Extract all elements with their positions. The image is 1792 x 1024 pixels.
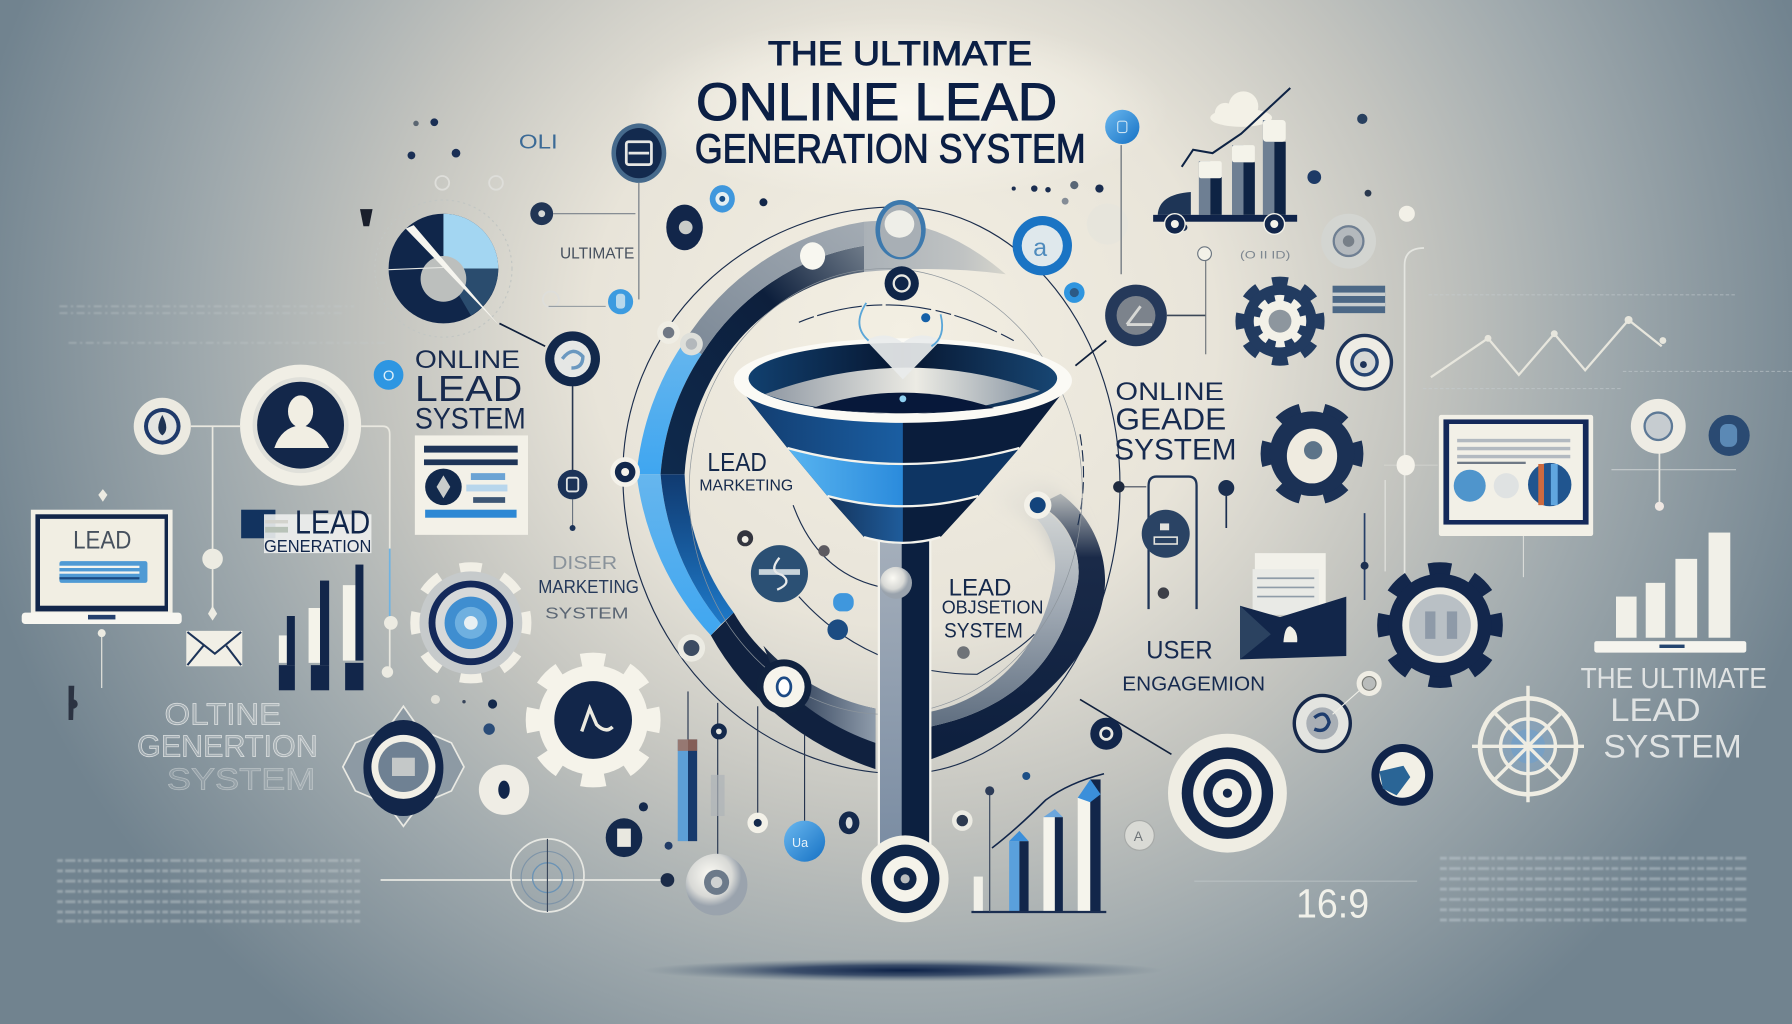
funnel label: lead objection system — [942, 574, 1043, 643]
floor shadow — [642, 959, 1163, 982]
ring segment: top light gray — [864, 221, 1006, 274]
label: OLI: OLI — [519, 131, 558, 154]
navy badge — [611, 123, 666, 183]
funnel label: lead objection system: LEAD — [949, 574, 1011, 601]
monitor — [1439, 415, 1593, 577]
funnel label: lead marketing: MARKETING — [699, 477, 793, 494]
ghost label: online generation system: OLTINE — [165, 697, 281, 732]
droplet — [866, 335, 941, 379]
padlock icon — [1113, 477, 1369, 609]
ghost label: the ultimate lead system: THE ULTIMATE — [1581, 663, 1767, 695]
ring segment: bottom steel — [763, 646, 875, 743]
funnel band 2 — [787, 448, 1019, 506]
funnel label: lead marketing: LEAD — [707, 447, 767, 477]
small cream node — [479, 765, 529, 815]
ghost label: online generation system — [137, 697, 318, 797]
gear: navy with white gear — [1242, 283, 1318, 359]
left label: online lead system — [415, 346, 526, 436]
right small floating dots — [1240, 114, 1415, 261]
faint text block: bottom right — [1440, 858, 1746, 920]
right curved connector — [1384, 248, 1438, 577]
node: top of stem sphere — [880, 567, 912, 599]
label: diser marketing system: DISER — [552, 552, 617, 573]
faint text block: bottom left — [57, 861, 360, 921]
gear: large navy — [1269, 410, 1355, 497]
right node with crosshair — [1611, 399, 1750, 511]
centre bar chart — [952, 772, 1106, 912]
blue hanging bar — [678, 739, 697, 841]
ghost label: the ultimate lead system: SYSTEM — [1603, 729, 1742, 765]
label: lead generation: LEAD — [295, 505, 370, 542]
ring node with leader — [1293, 671, 1382, 753]
right label: online geade system: ONLINE — [1115, 378, 1224, 406]
ghost label: online generation system: SYSTEM — [167, 762, 315, 797]
title — [695, 35, 1086, 171]
thin outer circle — [623, 207, 1120, 774]
funnel separators — [787, 448, 1019, 543]
title: GENERATION SYSTEM — [695, 125, 1086, 171]
ship wheel target — [1472, 686, 1584, 802]
small navy node with leader — [1080, 699, 1171, 754]
ghost label: online generation system: GENERTION — [137, 729, 318, 764]
ring segment: right steel — [929, 505, 1079, 727]
title: ONLINE LEAD — [696, 73, 1057, 132]
ghost label: the ultimate lead system: LEAD — [1610, 692, 1701, 728]
label: lead generation — [241, 505, 371, 556]
label: diser marketing system: MARKETING — [538, 576, 639, 597]
ring segment: upper light blue — [637, 343, 702, 474]
cream sphere — [686, 854, 747, 915]
gear: navy with window — [1386, 571, 1494, 679]
funnel label: lead objection system: OBJSETION — [942, 597, 1043, 618]
ring segment: bottom navy — [711, 613, 875, 769]
ring node navy — [1336, 334, 1393, 391]
top sphere node — [875, 200, 926, 259]
hexagon target — [343, 706, 464, 826]
laptop — [22, 510, 182, 624]
right label: online geade system: GEADE — [1115, 402, 1226, 437]
striped text tag — [1333, 286, 1385, 313]
label: user engagement — [1122, 636, 1265, 695]
left label: online lead system: ONLINE — [415, 346, 520, 374]
concentric target — [1168, 734, 1287, 853]
faint text block: upper left — [59, 306, 389, 343]
funnel — [734, 303, 1072, 846]
top left icons — [360, 118, 666, 346]
white ring node — [757, 659, 811, 714]
right small floating dots: (O II ID) — [1240, 249, 1291, 261]
funnel rim — [734, 338, 1072, 423]
title glow — [623, 17, 1171, 200]
left label: online lead system: LEAD — [415, 368, 522, 409]
ring segment: upper gray — [683, 222, 864, 354]
ring segment: lower light blue — [637, 474, 721, 635]
small floating dots lower left — [69, 686, 497, 735]
blue ball — [784, 821, 825, 862]
funnel liquid — [813, 393, 994, 413]
label: lead generation: GENERATION — [264, 536, 371, 556]
gear: white with navy center — [536, 663, 650, 777]
top right chart truck — [1105, 88, 1297, 274]
funnel mouth — [749, 343, 1057, 414]
funnel base target — [862, 835, 949, 922]
right label: online geade system — [1114, 378, 1237, 466]
central ring diagram — [623, 207, 1120, 774]
funnel band 3 — [827, 496, 978, 543]
small medal: A — [1134, 829, 1144, 844]
blue badge: O — [383, 369, 394, 385]
connector node column — [545, 331, 600, 531]
funnel band 1 — [734, 381, 1072, 464]
laptop: LEAD — [73, 527, 131, 555]
inner icon badge — [751, 545, 808, 602]
gear: blue target — [418, 570, 523, 675]
label: diser marketing system — [538, 552, 639, 622]
small dots — [408, 118, 460, 159]
funnel stem — [878, 537, 931, 846]
blue bubble — [1013, 216, 1072, 275]
dark drop node — [885, 266, 919, 301]
label: user engagement: USER — [1146, 636, 1213, 664]
label: diser marketing system: SYSTEM — [545, 605, 629, 622]
droplet arcs — [859, 303, 942, 346]
aspect ratio label: 16:9 — [1296, 881, 1369, 927]
zigzag line chart — [1423, 295, 1792, 389]
ring segment: upper navy — [661, 246, 864, 474]
left label: online lead system: SYSTEM — [415, 403, 526, 436]
ring segment: lower deep blue — [661, 474, 734, 624]
label: ultimate: ULTIMATE — [560, 245, 634, 262]
pie badge — [1371, 744, 1433, 806]
small target node — [134, 398, 191, 455]
thin target with line — [381, 839, 662, 912]
cloud — [1210, 91, 1272, 127]
pie chart — [375, 200, 512, 337]
label: user engagement: ENGAGEMION — [1122, 672, 1265, 695]
bottom centre hanging icons — [381, 691, 859, 915]
ring nodes — [610, 200, 1051, 714]
title: THE ULTIMATE — [768, 35, 1032, 73]
right white bar chart — [1594, 533, 1746, 653]
small faint rings — [435, 176, 559, 307]
blue badge — [374, 360, 403, 390]
small dots row — [1012, 181, 1187, 231]
envelope icon — [186, 631, 242, 666]
funnel label: lead objection system: SYSTEM — [944, 618, 1023, 643]
left bar chart — [279, 565, 363, 690]
blue bubble: a — [1033, 234, 1047, 262]
right label: online geade system: SYSTEM — [1114, 433, 1237, 466]
left content card — [415, 435, 528, 535]
small medal — [1125, 821, 1154, 850]
envelope with papers — [1240, 553, 1346, 659]
connector nodes — [98, 489, 398, 678]
ghost label: the ultimate lead system — [1581, 663, 1767, 765]
ring node gray — [1321, 214, 1376, 269]
truck bars — [1199, 161, 1210, 215]
funnel label: lead marketing — [699, 447, 793, 494]
soft wedge beside funnel — [977, 476, 1086, 560]
inner dashed arcs — [689, 269, 1084, 714]
user avatar node — [240, 365, 361, 486]
clock icon — [1105, 285, 1167, 346]
funnel inner wall — [765, 368, 1040, 414]
connector lines — [102, 426, 390, 688]
icons around top of funnel — [666, 181, 1211, 366]
blue ball: Ua — [792, 836, 808, 850]
ring segment: right navy — [929, 494, 1105, 760]
